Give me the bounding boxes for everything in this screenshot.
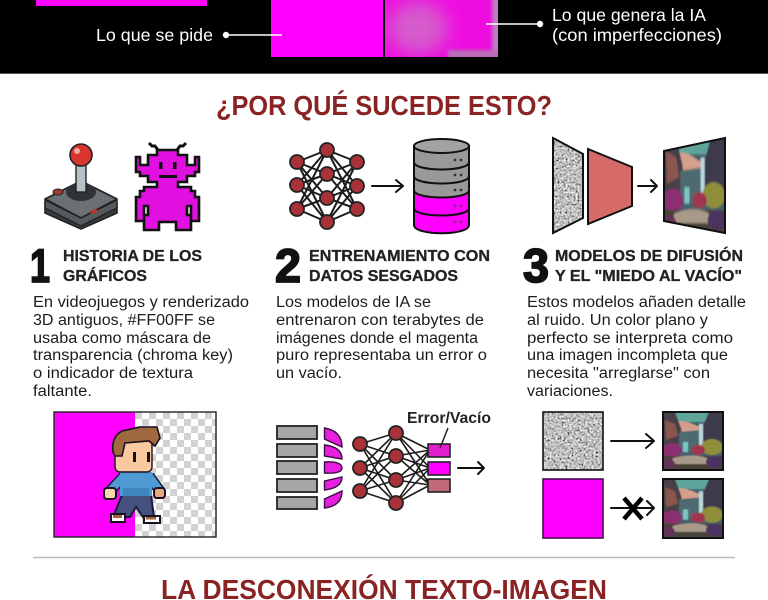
text block: column 3: al ruido. Un color plano y <box>527 312 708 329</box>
text block: column 3: necesita "arreglarse" con <box>527 365 710 382</box>
label: error or void: Error/Vacío <box>407 410 491 427</box>
text block: column 2: imágenes donde el magenta <box>276 330 478 347</box>
output boxes <box>428 444 450 492</box>
caption: generated <box>552 5 722 45</box>
swatch: requested flat magenta <box>271 0 383 57</box>
icon: neural network <box>290 143 364 229</box>
text block: column 2: puro representaba un error o <box>276 347 487 364</box>
text block: column 3: perfecto se interpreta como <box>527 330 733 347</box>
caption: generated: (con imperfecciones) <box>552 25 722 45</box>
text block: column 2: entrenaron con terabytes de <box>276 312 484 329</box>
heading: entrenamiento con datos sesgados <box>309 248 490 285</box>
text block: column 3: Estos modelos añaden detalle <box>527 294 746 311</box>
number 1: 1 <box>30 239 50 292</box>
heading: modelos de difusión: MODELOS DE DIFUSIÓN <box>555 246 743 265</box>
illustration: chroma key sprite <box>54 412 216 537</box>
number 2: 2 <box>275 239 301 292</box>
text block: column 2: Los modelos de IA se <box>276 294 431 311</box>
heading: modelos de difusión: Y EL "MIEDO AL VACÍO" <box>555 266 742 285</box>
arms <box>110 476 160 491</box>
icon: flat red plane <box>588 149 632 224</box>
heading: por qué sucede esto: ¿POR QUÉ SUCEDE ESTO? <box>216 90 552 121</box>
arrow: network to database <box>372 180 403 192</box>
swatch: AI generated magenta with imperfections <box>385 0 498 57</box>
text block: column 1 <box>33 294 249 400</box>
callout: generated leader <box>486 21 543 27</box>
swatch: top magenta bar <box>36 0 207 6</box>
text block: column 1: usaba como máscara de <box>33 330 211 347</box>
illustration: magenta blocked from painting <box>543 479 724 538</box>
text block: column 3: una imagen incompleta que <box>527 347 728 364</box>
caption: requested: Lo que se pide <box>96 25 213 45</box>
icon: cross <box>624 498 642 519</box>
callout: requested leader <box>223 32 282 38</box>
text block: column 1: faltante. <box>33 383 92 400</box>
arrow: plane to painting <box>638 180 657 192</box>
icon: joystick <box>45 144 117 229</box>
sprite: boy character <box>104 427 165 523</box>
icon: painting plane <box>662 138 726 233</box>
text block: column 3 <box>527 294 746 400</box>
magenta lens segments <box>324 428 342 508</box>
icon: database <box>414 139 469 233</box>
illustration: noise to painting <box>543 412 724 470</box>
heading: entrenamiento con datos sesgados: DATOS SESGADOS <box>309 268 458 285</box>
caption: generated: Lo que genera la IA <box>552 5 706 25</box>
text block: column 1: En videojuegos y renderizado <box>33 294 249 311</box>
number 3: 3 <box>523 239 549 292</box>
illustration: biased training network <box>277 410 491 510</box>
icon: pixel alien <box>136 143 199 230</box>
text block: column 2 <box>276 294 487 382</box>
text block: column 3: variaciones. <box>527 383 613 400</box>
text block: column 1: transparencia (chroma key) <box>33 347 233 364</box>
text block: column 1: 3D antiguos, #FF00FF se <box>33 312 215 329</box>
text block: column 1: o indicador de textura <box>33 365 193 382</box>
icon: noise plane <box>553 138 583 233</box>
heading: historia de los gráficos: HISTORIA DE LOS <box>63 248 202 265</box>
input rows <box>277 426 317 509</box>
text block: column 2: un vacío. <box>276 365 342 382</box>
panel: black header band <box>0 0 768 74</box>
heading: historia de los gráficos <box>63 248 202 285</box>
heading: entrenamiento con datos sesgados: ENTRENAMIENTO CON <box>309 248 490 265</box>
heading: historia de los gráficos: GRÁFICOS <box>63 266 147 285</box>
heading: modelos de difusión <box>555 246 743 285</box>
